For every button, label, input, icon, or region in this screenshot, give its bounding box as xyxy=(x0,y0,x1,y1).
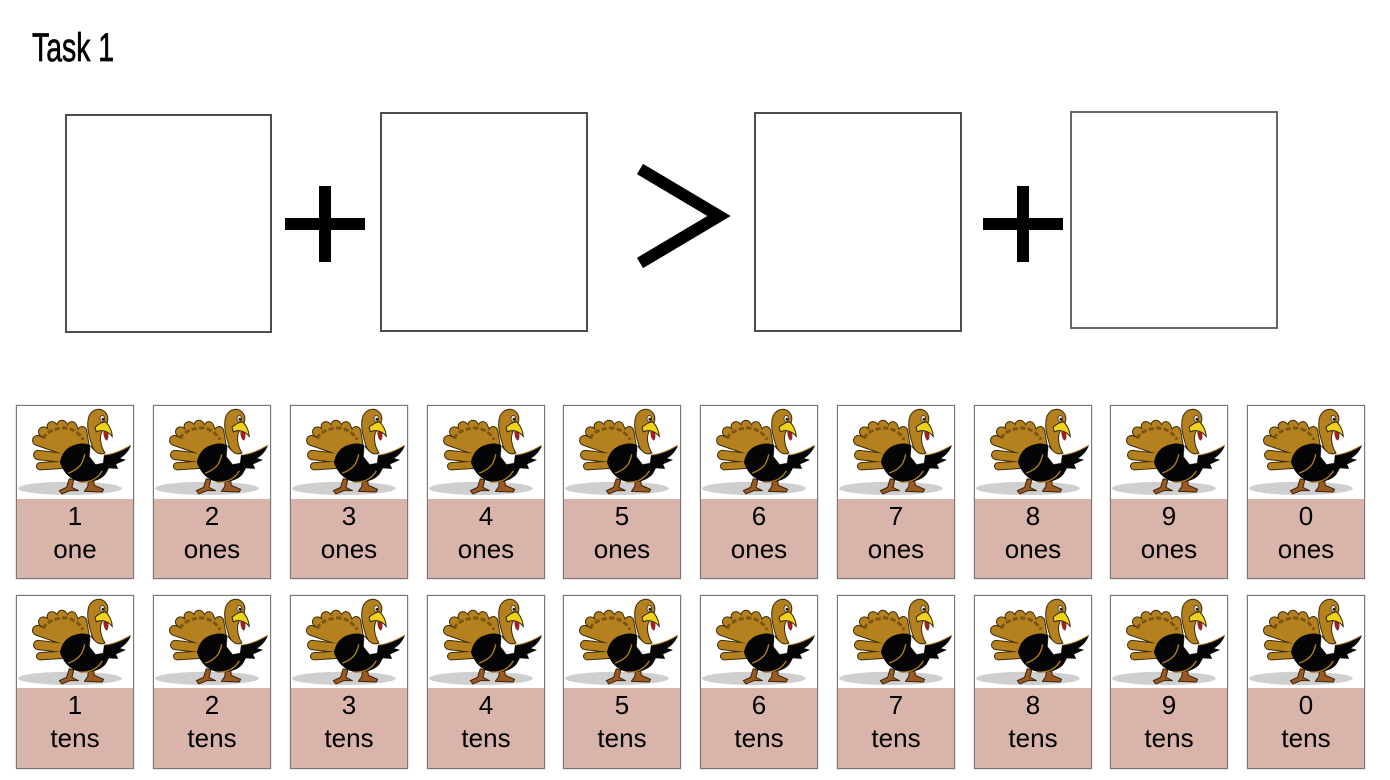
card: 3 ones: ones xyxy=(321,534,377,564)
plus sign 1 xyxy=(285,186,365,262)
card: 4 tens: 4 xyxy=(479,690,493,720)
card: 2 ones xyxy=(153,405,271,579)
title: Task 1 xyxy=(32,26,114,70)
card: 1 one xyxy=(16,405,134,579)
card: 7 ones: ones xyxy=(868,534,924,564)
card: 8 ones xyxy=(974,405,1092,579)
row of tens cards xyxy=(16,594,1366,770)
card: 2 tens xyxy=(153,595,271,769)
card: 0 ones: ones xyxy=(1278,534,1334,564)
greater-than sign xyxy=(637,164,731,268)
card: 0 tens xyxy=(1247,595,1365,769)
card: 5 ones xyxy=(563,405,681,579)
card: 9 tens: 9 xyxy=(1162,690,1176,720)
card: 2 ones: ones xyxy=(184,534,240,564)
card: 8 ones: ones xyxy=(1005,534,1061,564)
card: 7 tens: tens xyxy=(871,723,921,753)
card: 8 tens: tens xyxy=(1008,723,1058,753)
card: 6 ones: ones xyxy=(731,534,787,564)
card: 5 ones: ones xyxy=(594,534,650,564)
card: 8 ones: 8 xyxy=(1026,501,1040,531)
card: 3 tens xyxy=(290,595,408,769)
card: 1 tens xyxy=(16,595,134,769)
card: 0 tens: tens xyxy=(1281,723,1331,753)
card: 2 ones: 2 xyxy=(205,501,219,531)
plus sign 2 xyxy=(983,186,1063,262)
card: 6 tens: 6 xyxy=(752,690,766,720)
card: 1 one: one xyxy=(53,534,97,564)
answer box 4 xyxy=(1070,111,1278,329)
card: 4 ones: ones xyxy=(458,534,514,564)
card: 1 tens: 1 xyxy=(68,690,82,720)
card: 5 tens: tens xyxy=(597,723,647,753)
card: 9 tens: tens xyxy=(1144,723,1194,753)
card: 0 ones: 0 xyxy=(1299,501,1313,531)
card: 1 one: 1 xyxy=(68,501,82,531)
card: 9 ones: ones xyxy=(1141,534,1197,564)
card: 6 tens: tens xyxy=(734,723,784,753)
row of ones cards xyxy=(16,404,1366,580)
card: 4 ones: 4 xyxy=(479,501,493,531)
card: 7 ones: 7 xyxy=(889,501,903,531)
card: 5 ones: 5 xyxy=(615,501,629,531)
answer box 3 xyxy=(754,112,962,332)
card: 3 ones xyxy=(290,405,408,579)
card: 3 ones: 3 xyxy=(342,501,356,531)
card: 4 tens xyxy=(427,595,545,769)
card: 0 tens: 0 xyxy=(1299,690,1313,720)
card: 3 tens: tens xyxy=(324,723,374,753)
card: 5 tens xyxy=(563,595,681,769)
card: 6 tens xyxy=(700,595,818,769)
card: 6 ones xyxy=(700,405,818,579)
card: 2 tens: 2 xyxy=(205,690,219,720)
card: 8 tens xyxy=(974,595,1092,769)
card: 9 ones xyxy=(1110,405,1228,579)
card: 4 ones xyxy=(427,405,545,579)
card: 2 tens: tens xyxy=(187,723,237,753)
card: 7 ones xyxy=(837,405,955,579)
card: 7 tens: 7 xyxy=(889,690,903,720)
card: 3 tens: 3 xyxy=(342,690,356,720)
card: 4 tens: tens xyxy=(461,723,511,753)
card: 7 tens xyxy=(837,595,955,769)
card: 0 ones xyxy=(1247,405,1365,579)
card: 9 ones: 9 xyxy=(1162,501,1176,531)
card: 1 tens: tens xyxy=(50,723,100,753)
card: 9 tens xyxy=(1110,595,1228,769)
card: 8 tens: 8 xyxy=(1026,690,1040,720)
card: 6 ones: 6 xyxy=(752,501,766,531)
card: 5 tens: 5 xyxy=(615,690,629,720)
answer box 2 xyxy=(380,112,588,332)
answer box 1 xyxy=(65,114,272,333)
